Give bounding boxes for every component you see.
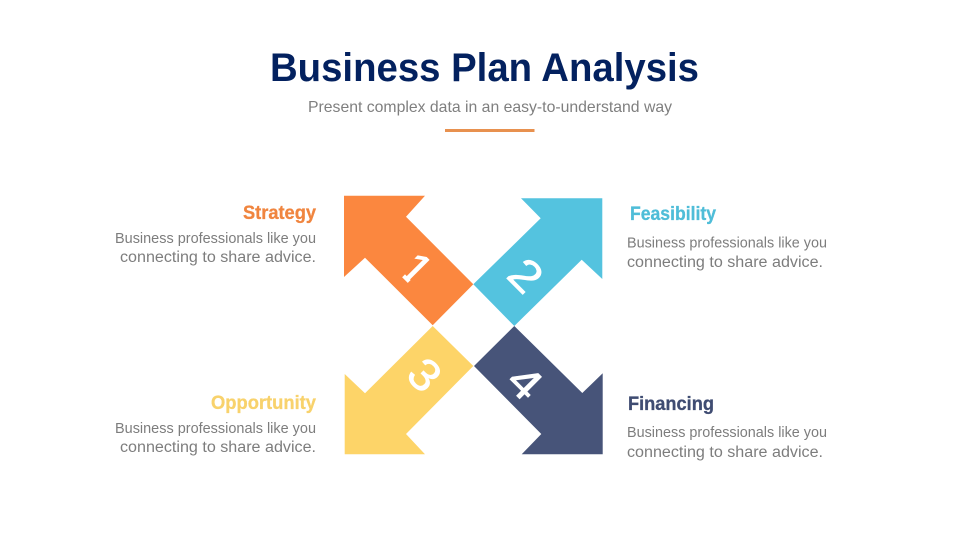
number 4: 4 [497,355,552,411]
arrow 2: blue [473,198,602,326]
subtitle: Present complex data in an easy-to-understand way [308,99,672,116]
text block: Financing: connecting to share advice. [627,444,823,461]
text block: Opportunity [115,393,316,456]
text block: Financing: Business professionals like you [627,425,827,441]
text block: Opportunity: Opportunity [211,393,316,414]
text block: Feasibility: connecting to share advice. [627,254,823,271]
text block: Feasibility: Feasibility [630,204,716,225]
text block: Strategy: Strategy [243,203,316,224]
text block: Strategy: connecting to share advice. [120,249,316,266]
accent rule [445,129,534,132]
number 3: 3 [398,348,452,402]
text block: Financing: Financing [628,394,714,415]
text block: Financing [627,394,827,461]
text block: Strategy [115,203,316,266]
title: Business Plan Analysis [270,46,699,90]
arrow 3: yellow [345,326,473,454]
text block: Opportunity: Business professionals like you [115,421,316,437]
text block: Feasibility: Business professionals like you [627,236,827,252]
arrow 4: navy [474,326,603,454]
arrow 1: orange [344,196,473,325]
text block: Opportunity: connecting to share advice. [120,439,316,456]
number 1: 1 [389,242,443,296]
text block: Feasibility [627,204,827,271]
number 2: 2 [498,248,553,303]
text block: Strategy: Business professionals like you [115,231,316,247]
